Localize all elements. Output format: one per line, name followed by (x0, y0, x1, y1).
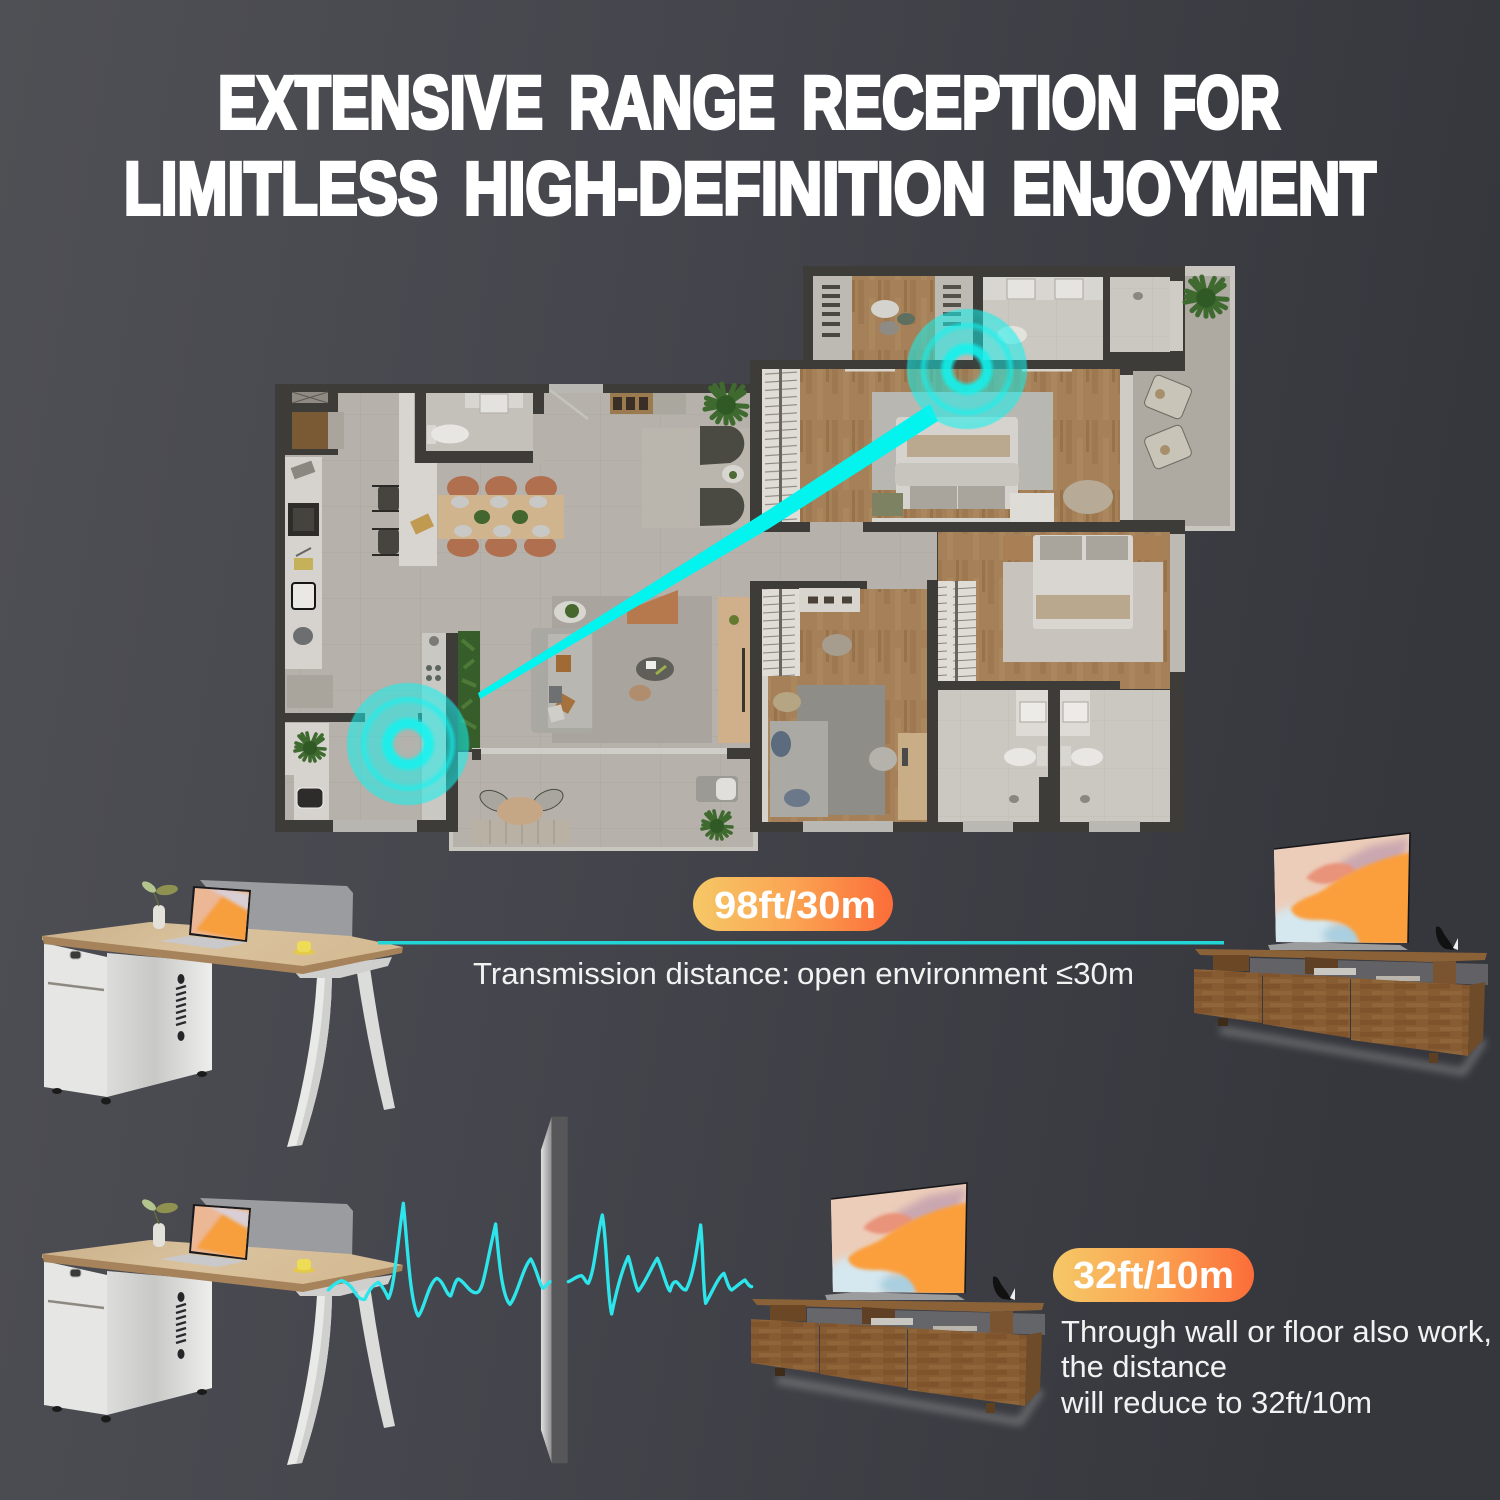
title: EXTENSIVE (218, 61, 543, 144)
dining table (438, 476, 564, 557)
caption: open environment distance: Transmission distance: (473, 956, 790, 991)
room: third bedroom (762, 581, 927, 822)
breakfast counter (372, 393, 437, 566)
room: walk-in closet (813, 276, 973, 360)
title: RANGE (569, 61, 775, 144)
laundry room (285, 723, 329, 820)
signal beam (478, 404, 938, 699)
badge: 98ft/30m (693, 877, 893, 931)
signal rings: bedroom (906, 308, 1028, 430)
room: closet with rack (292, 392, 344, 449)
room: twin bathrooms (927, 690, 1170, 832)
powder room (415, 393, 544, 463)
floor plan: west wing walls and floor (275, 384, 762, 851)
caption: through wall (1060, 1314, 1492, 1420)
badge: 32ft/10m (1053, 1248, 1254, 1302)
floor plan (275, 266, 1235, 851)
wall partition (541, 1117, 568, 1463)
title: FOR (1162, 61, 1280, 144)
title: ENJOYMENT (1012, 147, 1376, 230)
interior wall and planter (422, 631, 750, 832)
signal rings: router (346, 682, 470, 806)
title: LIMITLESS (124, 147, 438, 230)
caption: through wall: the distance (1061, 1349, 1227, 1384)
living room (531, 590, 750, 743)
room: master bath (983, 277, 1183, 360)
room: master bedroom (762, 369, 1133, 522)
tv: through wall (751, 1180, 1045, 1422)
caption: open environment distance: open environment ≤30m (797, 956, 1134, 991)
tv: open environment (1194, 830, 1488, 1072)
balcony lounge chairs (1143, 277, 1227, 470)
desk: through wall (42, 1197, 403, 1465)
floor plan: east wing walls (750, 266, 1235, 832)
balcony furniture (473, 776, 738, 844)
badge: 98ft/30m: 98ft/30m (714, 885, 876, 927)
room: second bedroom (927, 532, 1185, 694)
caption: through wall: will reduce to 32ft/10m (1060, 1385, 1372, 1420)
desk: open environment (42, 879, 403, 1147)
title (124, 61, 1376, 230)
title: RECEPTION (802, 61, 1138, 144)
connection line (378, 941, 1224, 944)
kitchen counter (285, 457, 333, 708)
wine shelf and lounge (610, 384, 770, 532)
caption: through wall: Through wall or floor also work, (1061, 1314, 1492, 1349)
title: HIGH-DEFINITION (464, 147, 986, 230)
badge: 32ft/10m: 32ft/10m (1073, 1255, 1234, 1297)
signal wave (328, 1203, 752, 1316)
window sills (803, 821, 1140, 832)
